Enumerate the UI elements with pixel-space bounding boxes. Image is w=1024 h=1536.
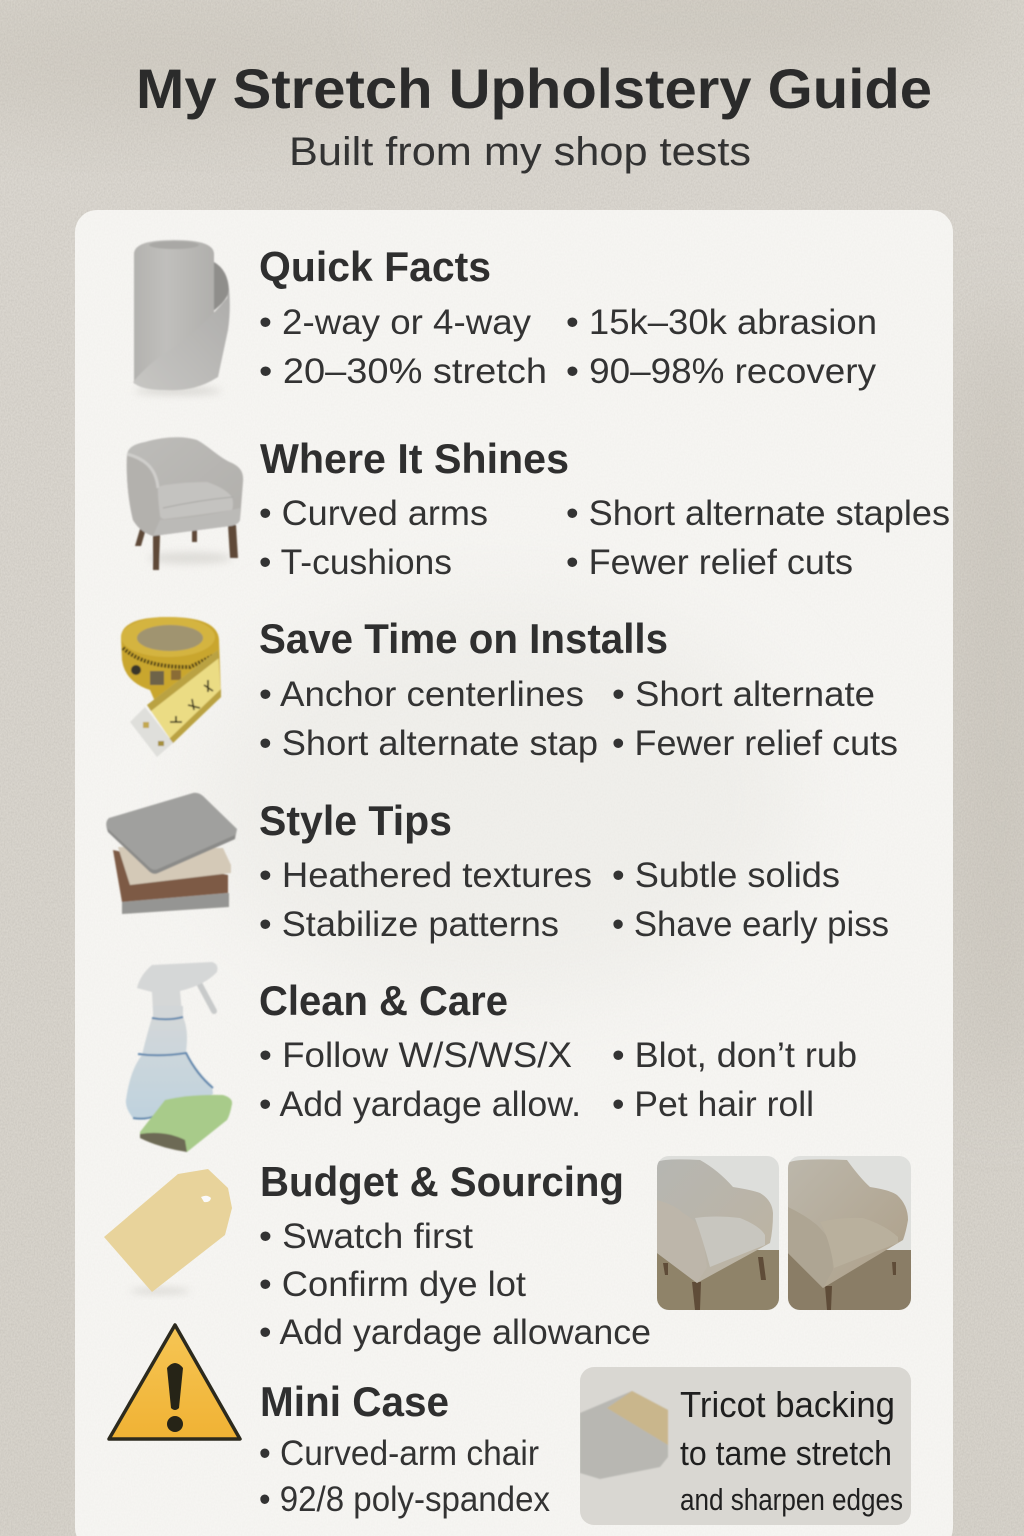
text: clean and care bullets: • Follow W/S/WS/X [259, 1036, 572, 1075]
text: clean and care bullets [259, 1036, 857, 1124]
text: clean and care bullets: • Pet hair roll [612, 1085, 814, 1124]
section: save time on installs [121, 615, 898, 763]
text: mini case bullets: • 92/8 poly-spandex [259, 1480, 550, 1519]
text: where it shines bullets: • Curved arms [259, 494, 488, 533]
text: quick facts bullets [259, 303, 877, 391]
text: callout copy [680, 1384, 903, 1517]
text: quick facts bullets: • 15k–30k abrasion [566, 303, 877, 342]
text: save time bullets: • Short alternate [612, 675, 875, 714]
text: quick facts bullets: • 20–30% stretch [259, 352, 547, 391]
section: mini case [109, 1325, 911, 1525]
icon: price tag [104, 1169, 232, 1294]
text: quick facts bullets: • 90–98% recovery [566, 352, 877, 391]
text: callout copy: to tame stretch [680, 1435, 892, 1473]
text: style tips bullets: • Shave early piss [612, 905, 889, 944]
heading: mini case: Mini Case [260, 1378, 449, 1425]
text: save time bullets [259, 675, 898, 763]
text: budget bullets [259, 1217, 651, 1352]
text: save time bullets: • Fewer relief cuts [612, 724, 898, 763]
text: where it shines bullets [259, 494, 950, 582]
subtitle: Built from my shop tests [289, 130, 751, 174]
icon: fabric roll [133, 240, 230, 395]
panel: guide card [75, 210, 953, 1536]
icon: armchair [127, 437, 243, 570]
text: save time bullets: • Anchor centerlines [259, 675, 584, 714]
text: style tips bullets: • Heathered textures [259, 856, 592, 895]
text: budget bullets: • Swatch first [259, 1217, 473, 1256]
icon: tricot swatch [580, 1391, 668, 1479]
heading: budget and sourcing: Budget & Sourcing [260, 1158, 624, 1205]
text: style tips bullets [259, 856, 889, 944]
heading: quick facts: Quick Facts [259, 243, 491, 290]
section: budget and sourcing [104, 1156, 911, 1352]
text: clean and care bullets: • Blot, don’t rub [612, 1036, 857, 1075]
section: style tips [106, 793, 889, 944]
photo: chair before [657, 1156, 779, 1310]
section: quick facts [133, 240, 877, 395]
text: style tips bullets: • Subtle solids [612, 856, 840, 895]
heading: style tips: Style Tips [259, 797, 452, 844]
text: style tips bullets: • Stabilize patterns [259, 905, 559, 944]
text: save time bullets: • Short alternate stap [259, 724, 598, 763]
text: where it shines bullets: • T-cushions [259, 543, 452, 582]
icon: warning triangle [109, 1325, 240, 1439]
section: clean and care [126, 962, 857, 1152]
title: My Stretch Upholstery Guide [136, 57, 932, 120]
icon: measuring tape [121, 617, 221, 757]
text: clean and care bullets: • Add yardage allow. [259, 1085, 581, 1124]
icon: spray bottle with sponge [126, 962, 232, 1152]
section: where it shines [127, 435, 950, 582]
text: quick facts bullets: • 2-way or 4-way [259, 303, 532, 342]
text: budget bullets: • Confirm dye lot [259, 1265, 526, 1304]
text: mini case bullets [259, 1434, 550, 1519]
heading: where it shines: Where It Shines [260, 435, 569, 482]
icon: fabric swatch stack [106, 793, 237, 914]
text: where it shines bullets: • Fewer relief cuts [566, 543, 853, 582]
text: callout copy: and sharpen edges [680, 1482, 903, 1517]
photo: chair after [788, 1156, 911, 1310]
callout: tricot backing [580, 1367, 911, 1525]
text: budget bullets: • Add yardage allowance [259, 1313, 651, 1352]
text: callout copy: Tricot backing [680, 1384, 895, 1425]
heading: clean and care: Clean & Care [259, 977, 508, 1024]
text: where it shines bullets: • Short alternate staples [566, 494, 950, 533]
heading: save time on installs: Save Time on Installs [259, 615, 668, 662]
text: mini case bullets: • Curved-arm chair [259, 1434, 539, 1473]
